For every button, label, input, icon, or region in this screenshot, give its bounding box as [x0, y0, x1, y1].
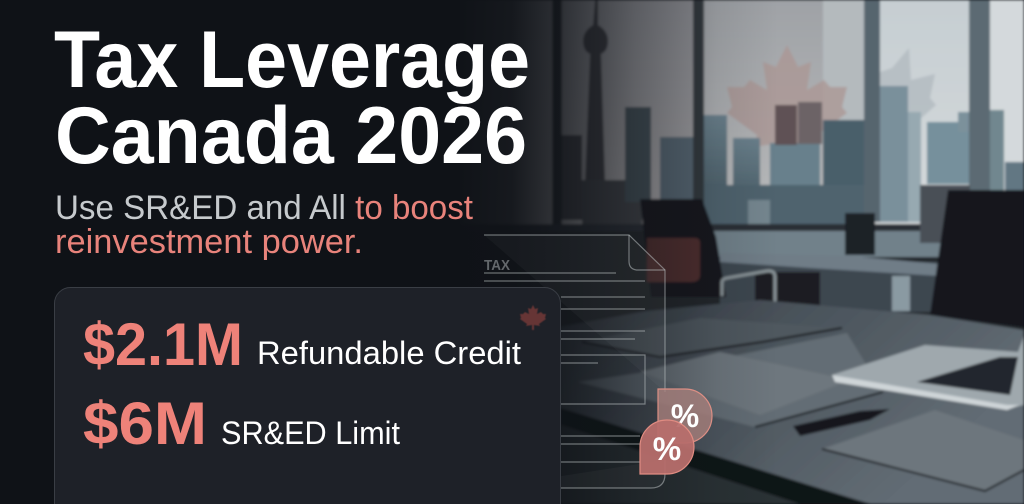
- back desk: [720, 253, 940, 276]
- windows and sky: [460, 0, 1024, 235]
- maple leaf on glass: [727, 45, 936, 155]
- tax document line art: [484, 235, 665, 488]
- stat: SR&ED limit: [83, 390, 400, 457]
- floor: [561, 425, 800, 504]
- subtitle: [55, 189, 474, 261]
- window mullions: [460, 0, 1024, 232]
- chair back centre: [640, 199, 775, 302]
- title: Tax Leverage: [54, 15, 530, 105]
- office photo: [460, 0, 1024, 504]
- panel: key figures: [54, 288, 560, 504]
- stat: refundable credit: Refundable Credit: [257, 335, 521, 371]
- stat: SR&ED limit: $6M: [83, 390, 207, 457]
- chair behind: [920, 185, 970, 243]
- title: [54, 15, 530, 181]
- icon: maple leaf: [520, 305, 546, 330]
- lower room: [460, 231, 1024, 504]
- desk organiser: [845, 213, 875, 255]
- laptop: [832, 336, 1024, 410]
- cn tower: [583, 0, 608, 180]
- skyline: [560, 0, 1024, 225]
- label: tax: TAX: [484, 257, 510, 274]
- chair back right: [930, 190, 1024, 327]
- stat: SR&ED limit: SR&ED Limit: [221, 415, 400, 451]
- desk front edge: [561, 408, 870, 504]
- subtitle: Use SR&ED and All to boost: [55, 189, 474, 227]
- percent badge front: %: [653, 431, 681, 467]
- percent badge back: %: [671, 398, 699, 434]
- percent badge back: [658, 389, 712, 443]
- papers on desk: [578, 318, 1024, 491]
- stat: refundable credit: $2.1M: [83, 311, 243, 378]
- main desk surface: [460, 300, 1024, 504]
- percent badge front: [640, 420, 694, 474]
- pen: [793, 409, 890, 436]
- stat: refundable credit: [83, 311, 521, 378]
- subtitle: reinvestment power.: [55, 223, 363, 261]
- title: Canada 2026: [55, 91, 527, 181]
